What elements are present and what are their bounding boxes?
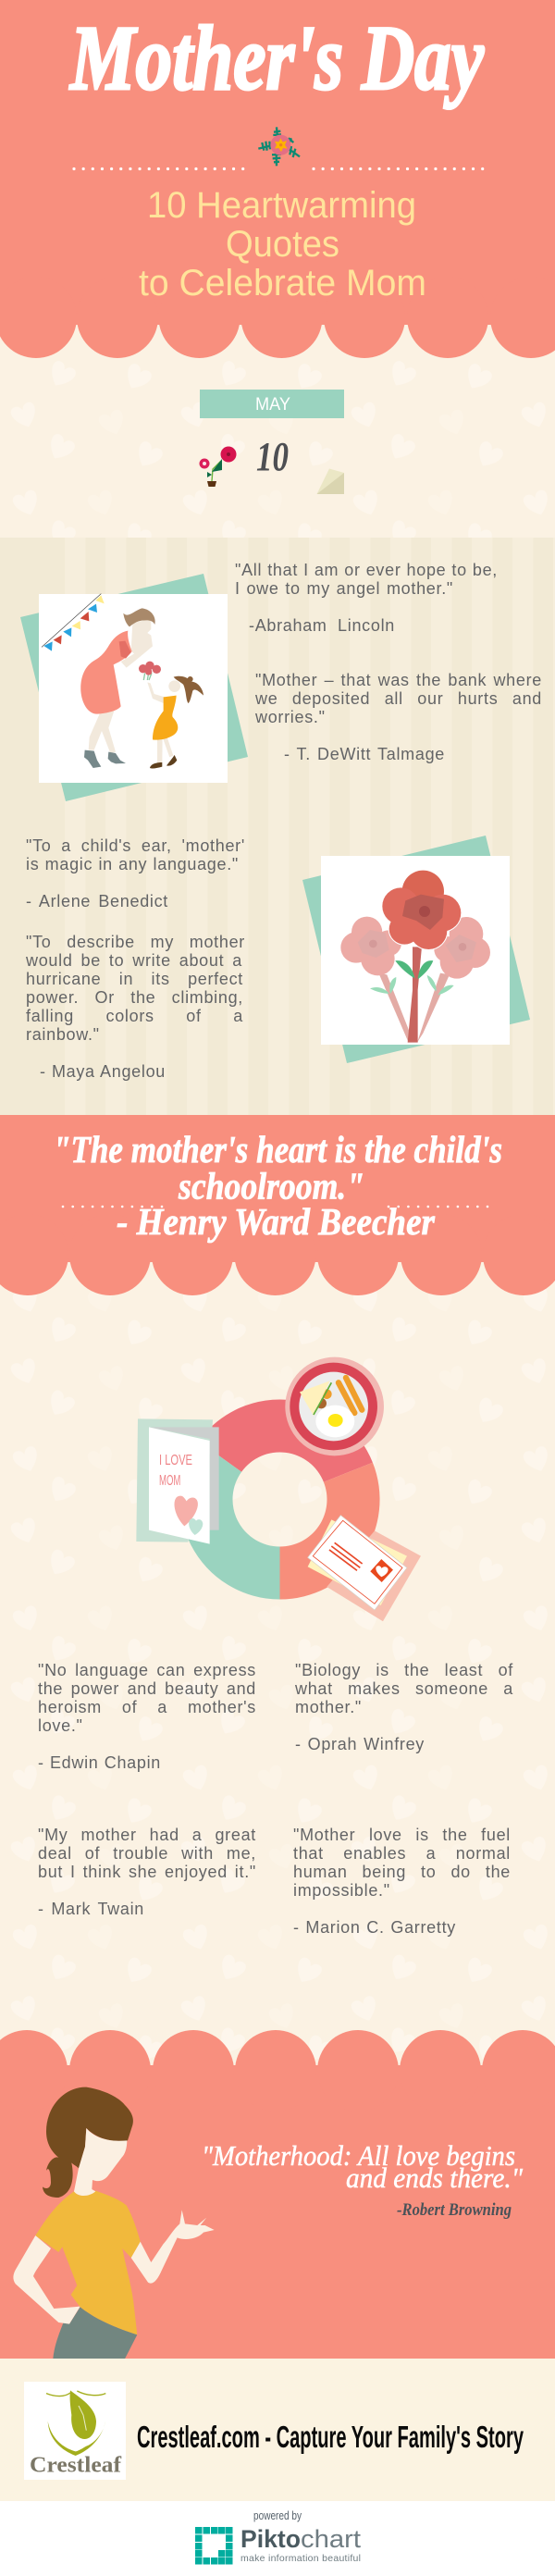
icon: page curl — [316, 468, 344, 494]
quote: Abraham Lincoln — [235, 561, 498, 635]
quote: Edwin Chapin: "No language can express — [38, 1661, 256, 1679]
quote: Arlene Benedict — [26, 836, 245, 910]
quote: T. DeWitt Talmage: "Mother – that was the bank where — [255, 671, 542, 689]
quote: Oprah Winfrey: mother." — [295, 1698, 362, 1716]
quote: Abraham Lincoln: -Abraham Lincoln — [249, 616, 395, 635]
quote text: schoolroom." — [178, 1164, 364, 1207]
quote: Arlene Benedict: is magic in any language." — [26, 855, 239, 873]
icon: greeting card — [136, 1418, 219, 1544]
donut chart with gifts — [136, 1357, 421, 1621]
quote: Edwin Chapin — [38, 1661, 256, 1772]
quote: Maya Angelou: hurricane in its perfect — [26, 970, 243, 988]
picture: mother and daughter — [20, 574, 248, 801]
quote: Marion C. Garretty: human being to do the — [293, 1863, 511, 1881]
quote: Abraham Lincoln: I owe to my angel mother." — [235, 579, 453, 598]
quote: Maya Angelou — [26, 933, 245, 1081]
dotted divider — [63, 1206, 488, 1208]
quote: Marion C. Garretty: that enables a normal — [293, 1844, 511, 1863]
quote: Maya Angelou: falling colors of a — [26, 1007, 243, 1025]
quote: Arlene Benedict: - Arlene Benedict — [26, 892, 168, 910]
quote: Mark Twain: "My mother had a great — [38, 1826, 256, 1844]
quote: T. DeWitt Talmage: we deposited all our hurts and — [255, 689, 542, 708]
quote: Marion C. Garretty: "Mother love is the fuel — [293, 1826, 511, 1844]
quote: Abraham Lincoln: "All that I am or ever hope to be, — [235, 561, 498, 579]
dotted divider — [74, 167, 485, 170]
panel: striped quotes section — [0, 538, 555, 1116]
quote: Maya Angelou: would be to write about a — [26, 951, 242, 970]
subtitle: 10 Heartwarming — [147, 185, 416, 226]
picture: carnations — [302, 836, 530, 1063]
quote: Edwin Chapin: the power and beauty and — [38, 1679, 256, 1698]
icon: breakfast plate — [285, 1357, 384, 1455]
date bar: May: MAY — [255, 395, 290, 415]
banner: Motherhood quote — [0, 2030, 555, 2359]
subtitle: to Celebrate Mom — [139, 263, 426, 303]
quote: Mark Twain: but I think she enjoyed it." — [38, 1863, 256, 1881]
quote: Mark Twain: - Mark Twain — [38, 1900, 144, 1918]
quote author: -Robert Browning — [397, 2200, 512, 2220]
logo: Piktochart wordmark: make information beautiful — [240, 2553, 361, 2564]
quote: T. DeWitt Talmage: worries." — [255, 708, 326, 726]
quote: Marion C. Garretty: impossible." — [293, 1881, 390, 1900]
quote: T. DeWitt Talmage — [255, 671, 542, 763]
quote: Marion C. Garretty — [293, 1826, 511, 1937]
date number: 10: 10 — [256, 434, 289, 479]
quote text: "Motherhood: All love begins — [202, 2139, 515, 2172]
subtitle: Quotes — [226, 224, 339, 265]
logo: Piktochart mark — [195, 2527, 233, 2565]
quote text: and ends there." — [346, 2161, 524, 2194]
chart: donut — [180, 1399, 380, 1599]
quote: T. DeWitt Talmage: - T. DeWitt Talmage — [284, 745, 445, 763]
illustration: mother — [80, 608, 155, 768]
quote: Arlene Benedict: "To a child's ear, 'mother' — [26, 836, 245, 855]
footer: Crestleaf — [0, 2359, 555, 2501]
logo: Crestleaf: Crestleaf — [30, 2454, 122, 2478]
quote text — [202, 2139, 524, 2194]
footer: powered by Piktochart: powered by — [253, 2509, 302, 2522]
quote: Edwin Chapin: love." — [38, 1716, 83, 1735]
quote: Mark Twain: deal of trouble with me, — [38, 1844, 256, 1863]
logo: Crestleaf — [24, 2382, 126, 2480]
quote: Marion C. Garretty: - Marion C. Garretty — [293, 1918, 456, 1937]
quote: Maya Angelou: power. Or the climbing, — [26, 988, 243, 1007]
banner: Henry Ward Beecher quote — [0, 1115, 555, 1295]
quote: Mark Twain — [38, 1826, 256, 1918]
logo: Piktochart wordmark — [240, 2525, 362, 2564]
quote: Oprah Winfrey — [295, 1661, 513, 1753]
icon: flower ornament — [258, 127, 300, 166]
footer: powered by Piktochart — [0, 2501, 555, 2576]
quote text: - Henry Ward Beecher — [117, 1200, 436, 1243]
quote: Oprah Winfrey: - Oprah Winfrey — [295, 1735, 425, 1753]
subtitle — [139, 185, 426, 303]
quote: Oprah Winfrey: what makes someone a — [295, 1679, 513, 1698]
icon: greeting card: I LOVE — [159, 1453, 192, 1468]
header banner — [0, 0, 555, 358]
date bar: May — [200, 390, 344, 418]
logo: Piktochart wordmark: Pikto — [240, 2525, 301, 2553]
icon: potted flower — [200, 446, 237, 487]
quote: Edwin Chapin: heroism of a mother's — [38, 1698, 256, 1716]
logo: Piktochart wordmark: chart — [301, 2525, 362, 2553]
quote: Maya Angelou: "To describe my mother — [26, 933, 245, 951]
illustration: woman — [13, 2087, 215, 2359]
quote: Oprah Winfrey: "Biology is the least of — [295, 1661, 513, 1679]
quote text — [53, 1128, 502, 1243]
icon: bunting — [42, 594, 105, 651]
icon: envelopes — [308, 1516, 421, 1621]
icon: greeting card: MOM — [159, 1473, 180, 1489]
illustration: daughter with bouquet — [139, 662, 204, 769]
quote: Maya Angelou: - Maya Angelou — [40, 1062, 166, 1081]
quote: Maya Angelou: rainbow." — [26, 1025, 100, 1044]
quote: Edwin Chapin: - Edwin Chapin — [38, 1753, 161, 1772]
